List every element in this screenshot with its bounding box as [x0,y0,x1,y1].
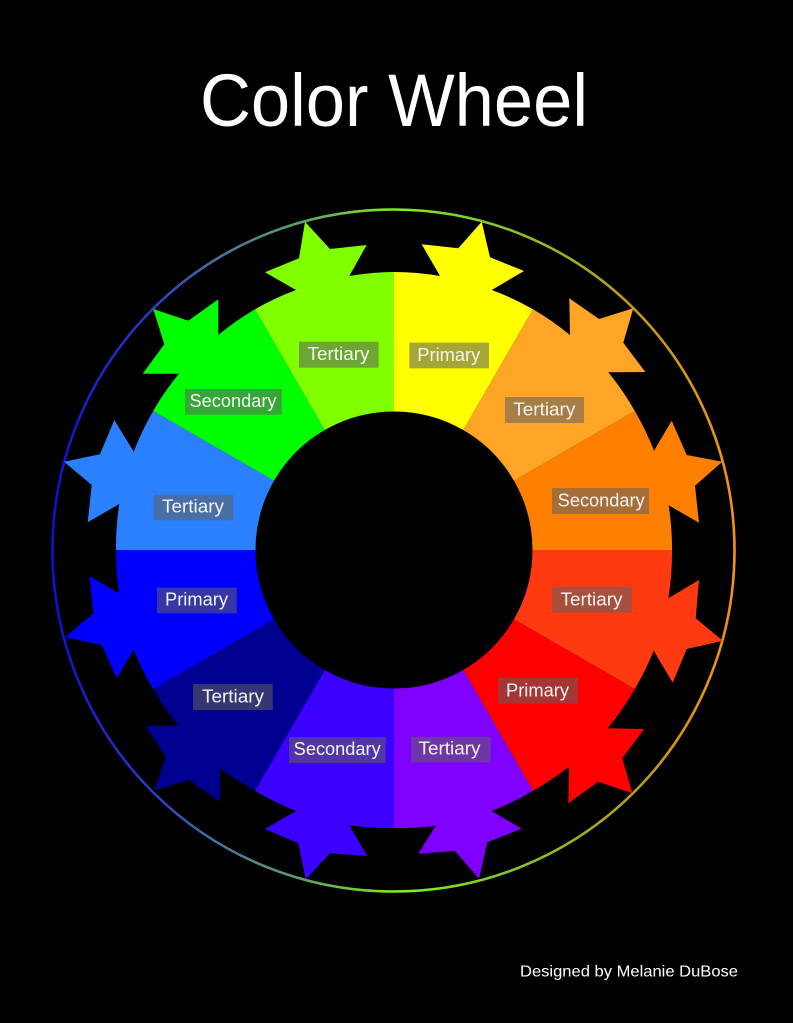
wedge: violet [394,670,533,879]
wedge: yellow [394,222,533,430]
label: azure tertiary [154,495,233,520]
label: blue primary [157,588,237,613]
color wheel [64,222,723,879]
label: orange secondary [552,488,649,514]
wedge: indigo [255,670,394,879]
wedge: red-orange [514,550,723,689]
label: chartreuse tertiary [299,342,379,368]
label: yellow primary [409,343,489,368]
label: red primary [498,678,578,704]
wedge: navy [145,619,325,802]
label: light orange tertiary: Tertiary [513,399,575,419]
label: red-orange tertiary: Tertiary [560,590,622,610]
label: blue primary: Primary [165,590,228,610]
wedge: blue [65,550,274,689]
label: indigo secondary: Secondary [294,739,381,759]
wedge: orange [514,411,722,550]
label: azure tertiary: Tertiary [162,496,224,516]
label: violet tertiary: Tertiary [418,738,480,758]
label: red-orange tertiary [552,587,632,613]
label: indigo secondary [289,737,386,763]
label: violet tertiary [411,737,491,762]
wedge: light orange [463,298,645,481]
wedge: red [463,619,644,803]
label: red primary: Primary [506,680,569,700]
label: navy tertiary [193,684,273,710]
wedge: green [143,299,325,481]
outer gradient ring [52,210,734,892]
credit: Designed by Melanie DuBose [520,964,738,981]
label: orange secondary: Secondary [558,490,645,510]
title: Color Wheel [200,59,588,142]
label: chartreuse tertiary: Tertiary [308,344,370,364]
label: light orange tertiary [505,397,584,423]
label: green secondary [185,389,282,415]
label: navy tertiary: Tertiary [202,686,264,706]
label: yellow primary: Primary [417,345,480,365]
label: green secondary: Secondary [190,391,276,411]
wedge: chartreuse [255,222,394,430]
wedge: azure [64,411,274,550]
